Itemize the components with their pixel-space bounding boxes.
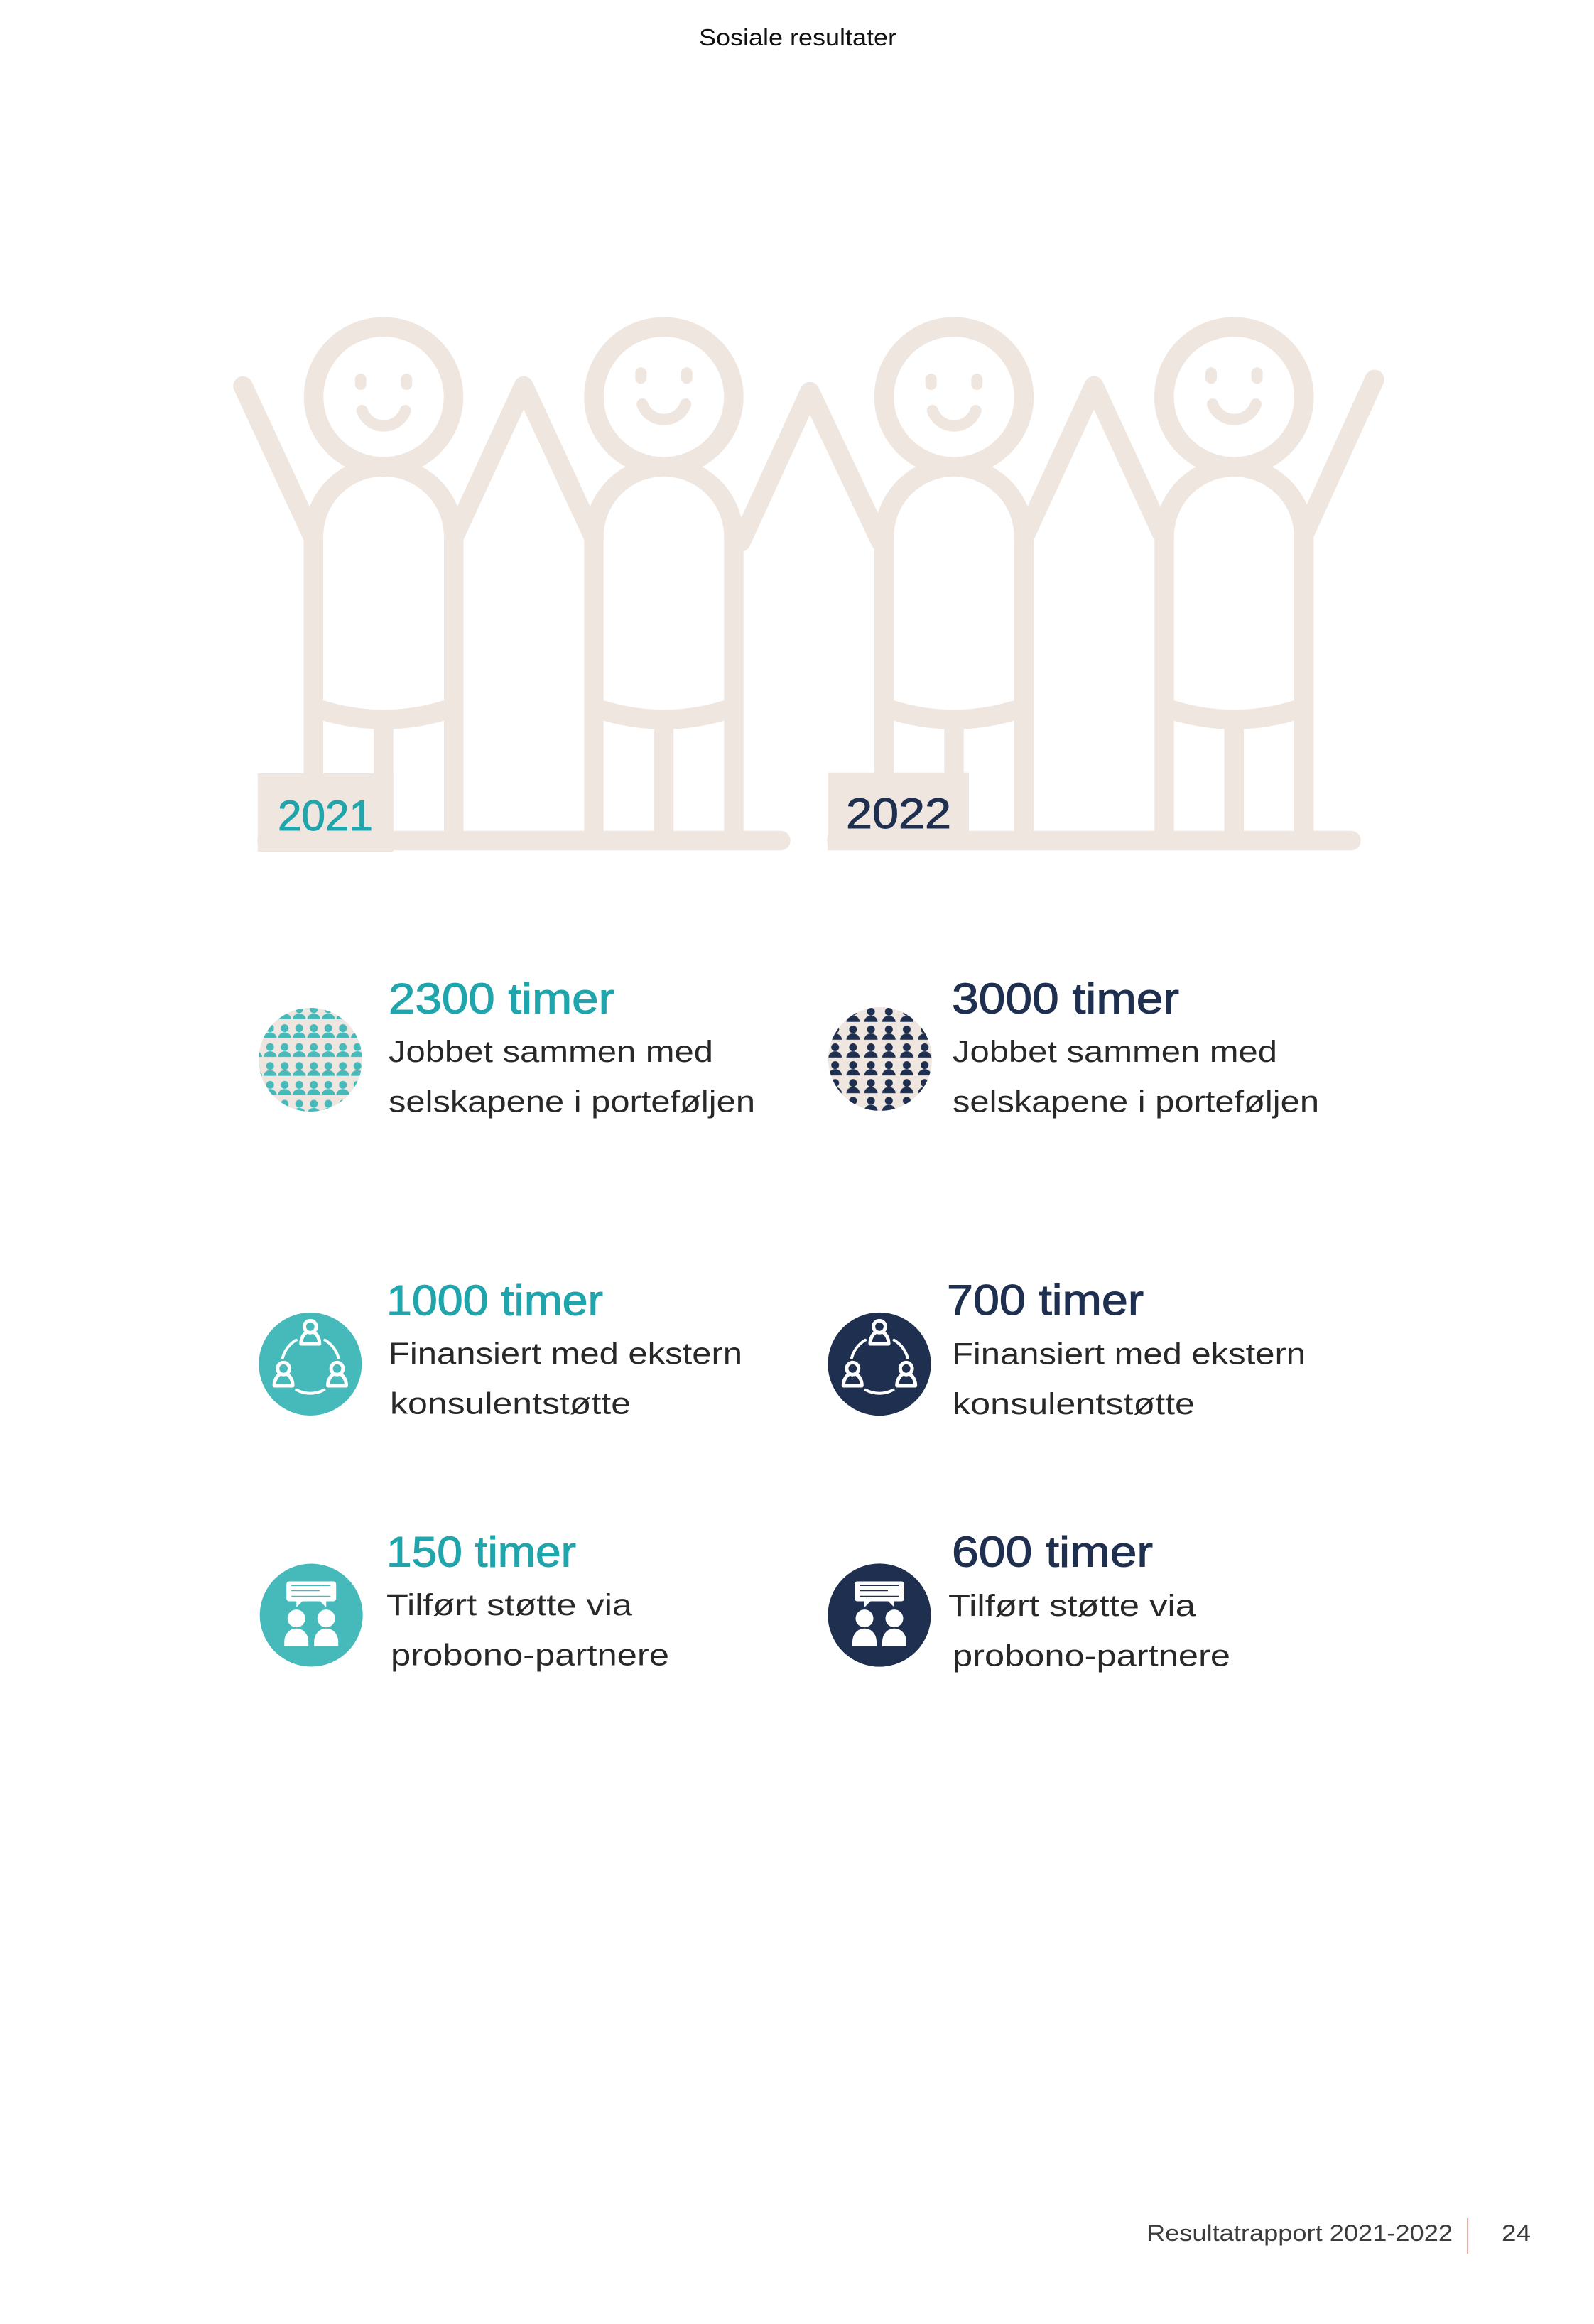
icon: pro bono chat navy xyxy=(828,1563,931,1667)
icon: consulting circle navy xyxy=(828,1313,931,1416)
stat: 3000 timer 2022 xyxy=(828,974,1319,1119)
year tag 2021: 2021 xyxy=(278,792,373,840)
raised arms between person 1 and 2 xyxy=(454,386,594,538)
person 3 xyxy=(884,327,1024,840)
description xyxy=(952,1337,1306,1421)
description: konsulentstøtte xyxy=(390,1387,631,1421)
illustration: 2022 people xyxy=(828,327,1375,850)
description: Jobbet sammen med xyxy=(953,1035,1277,1069)
ground line 2022 xyxy=(837,831,1351,850)
page title: Sosiale resultater xyxy=(699,24,896,50)
description xyxy=(389,1035,755,1119)
description: probono-partnere xyxy=(953,1639,1230,1673)
description: Tilført støtte via xyxy=(386,1588,632,1622)
heading: 700 timer xyxy=(947,1276,1144,1324)
icon: pro bono chat teal xyxy=(260,1564,363,1666)
heading: 1000 timer xyxy=(386,1277,603,1324)
description xyxy=(386,1588,669,1673)
icon: crowd navy xyxy=(828,1007,932,1111)
description: Finansiert med ekstern xyxy=(389,1337,742,1371)
illustration: 2021 people xyxy=(243,327,781,852)
person 4 xyxy=(1164,327,1375,840)
year tag 2021 xyxy=(258,773,394,852)
description: Tilført støtte via xyxy=(948,1589,1196,1623)
year tag 2022 xyxy=(828,773,969,850)
description xyxy=(948,1589,1230,1673)
stat: 150 timer 2021 xyxy=(260,1528,669,1673)
stat: 2300 timer 2021 xyxy=(259,974,755,1119)
stat: 700 timer 2022 xyxy=(828,1276,1306,1421)
stat: 1000 timer 2021 xyxy=(259,1277,742,1421)
person 1 xyxy=(243,327,454,840)
page number: 24 xyxy=(1502,2220,1531,2246)
report name: Resultatrapport 2021-2022 xyxy=(1146,2220,1453,2246)
description xyxy=(389,1337,742,1421)
raised arms between person 3 and 4 xyxy=(1024,386,1164,538)
stat: 600 timer 2022 xyxy=(828,1528,1230,1673)
footer xyxy=(1146,2218,1531,2254)
description: probono-partnere xyxy=(391,1639,669,1673)
heading: 150 timer xyxy=(386,1528,576,1575)
description: konsulentstøtte xyxy=(953,1387,1195,1421)
person 2 xyxy=(594,327,734,840)
description: Finansiert med ekstern xyxy=(952,1337,1306,1371)
heading: 3000 timer xyxy=(952,974,1179,1023)
icon: crowd teal xyxy=(259,1008,362,1112)
description xyxy=(953,1035,1319,1119)
ground line 2021 xyxy=(267,831,781,850)
year tag 2022: 2022 xyxy=(846,790,951,837)
description: selskapene i porteføljen xyxy=(953,1085,1319,1119)
icon: consulting circle teal xyxy=(259,1313,362,1416)
description: Jobbet sammen med xyxy=(389,1035,713,1069)
heading: 2300 timer xyxy=(389,974,614,1023)
description: selskapene i porteføljen xyxy=(389,1085,755,1119)
heading: 600 timer xyxy=(952,1528,1153,1575)
arms joining 2021 and 2022 xyxy=(741,392,881,542)
